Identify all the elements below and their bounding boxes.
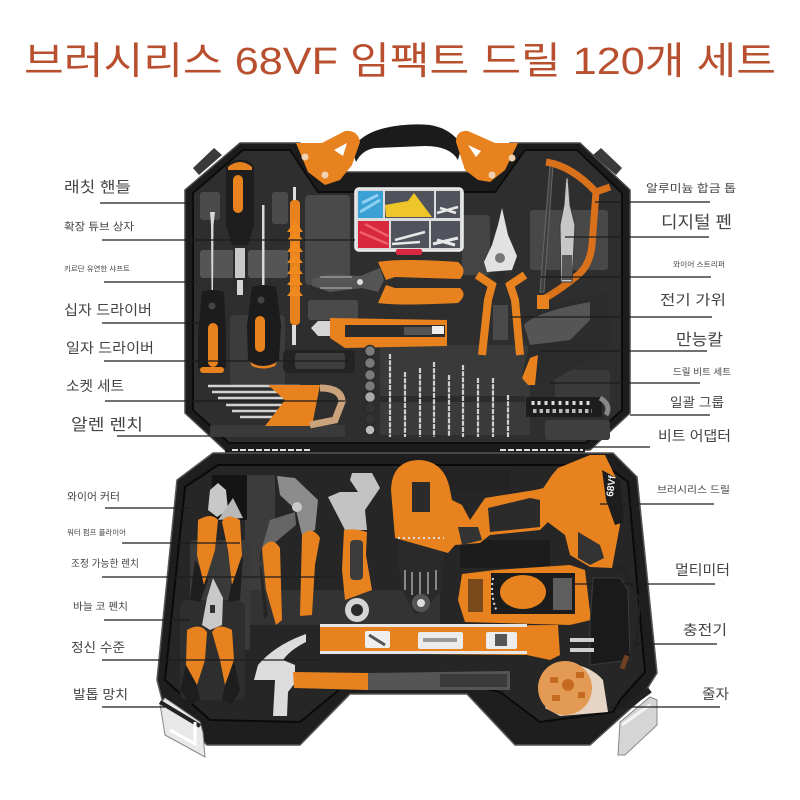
icon: expansion tube box [355, 188, 463, 255]
panel: lower case tray [157, 453, 657, 757]
label: 전기 가위 [660, 292, 726, 308]
label: 조정 가능한 렌치 [71, 558, 139, 570]
icon: socket handle [283, 350, 355, 373]
leader lines [100, 202, 720, 707]
title: 브러시리스 68VF 임팩트 드릴 120개 세트 [24, 41, 776, 83]
icon: claw hammer [254, 634, 510, 716]
icon: wire stripper [312, 260, 464, 304]
icon: utility knife [311, 318, 447, 348]
icon: needle nose pliers [180, 578, 240, 705]
label: 키르단 유연한 샤프트 [64, 264, 131, 273]
label: 래칫 핸들 [64, 179, 131, 196]
label: 알렌 렌치 [71, 416, 143, 434]
tray shell [157, 453, 657, 745]
tray recesses [200, 192, 610, 440]
icon: hinge row [225, 447, 585, 453]
panel: upper case lid [185, 124, 630, 450]
label: 드릴 비트 세트 [673, 367, 731, 377]
icon: bit batch [526, 397, 608, 417]
icon: charger [570, 567, 640, 670]
icon: drill bits [380, 354, 525, 437]
labels: lower right [657, 485, 730, 702]
label: 알루미늄 합금 톱 [646, 181, 736, 195]
icon: brushless drill [391, 455, 624, 615]
label: 바늘 코 펜치 [73, 601, 128, 613]
icon: electric scissors [477, 208, 525, 355]
icon: ratchet handle screwdriver [226, 160, 254, 295]
icon: left latch [160, 698, 205, 757]
label: 정신 수준 [71, 640, 125, 655]
icon: corner tabs [193, 148, 622, 175]
icon: water pump pliers [260, 476, 320, 625]
icon: tape measure [538, 661, 608, 716]
label: 십자 드라이버 [64, 302, 152, 318]
lid shell [185, 143, 630, 450]
labels: upper right [646, 181, 736, 444]
icon: carry handle [296, 124, 518, 185]
label: 일자 드라이버 [66, 340, 154, 356]
label: 워터 펌프 플라이어 [67, 527, 126, 537]
icon: cross screwdriver [247, 205, 281, 368]
icon: flexible shaft [287, 187, 303, 345]
icon: spirit level [320, 624, 560, 660]
label: 소켓 세트 [66, 378, 124, 394]
icon: aluminum alloy saw [522, 162, 612, 385]
label: 발톱 망치 [73, 687, 128, 702]
label: 디지털 펜 [661, 213, 732, 232]
label: 줄자 [702, 686, 729, 702]
label: 확장 튜브 상자 [64, 220, 134, 233]
label: 충전기 [683, 622, 727, 638]
icon: socket set [364, 346, 376, 435]
icon: right latch [617, 690, 657, 755]
label: 만능칼 [676, 331, 723, 349]
label: 와이어 스트리퍼 [673, 259, 725, 269]
label: 비트 어댑터 [658, 428, 731, 444]
labels: lower left [67, 491, 139, 702]
label: 멀티미터 [675, 562, 730, 578]
icon: flat screwdriver [198, 212, 226, 373]
battery voltage mark: 68Vf [605, 474, 619, 497]
label: 와이어 커터 [67, 491, 120, 503]
icon: wire cutter pliers [190, 475, 247, 602]
icon: hex keys [208, 385, 342, 426]
icon: digital pen [560, 178, 575, 282]
label: 브러시리스 드릴 [657, 485, 730, 496]
icon: multimeter [458, 565, 591, 625]
labels: upper left [64, 179, 154, 434]
label: 일괄 그룹 [670, 395, 724, 410]
icon: adjustable wrench [328, 473, 380, 622]
